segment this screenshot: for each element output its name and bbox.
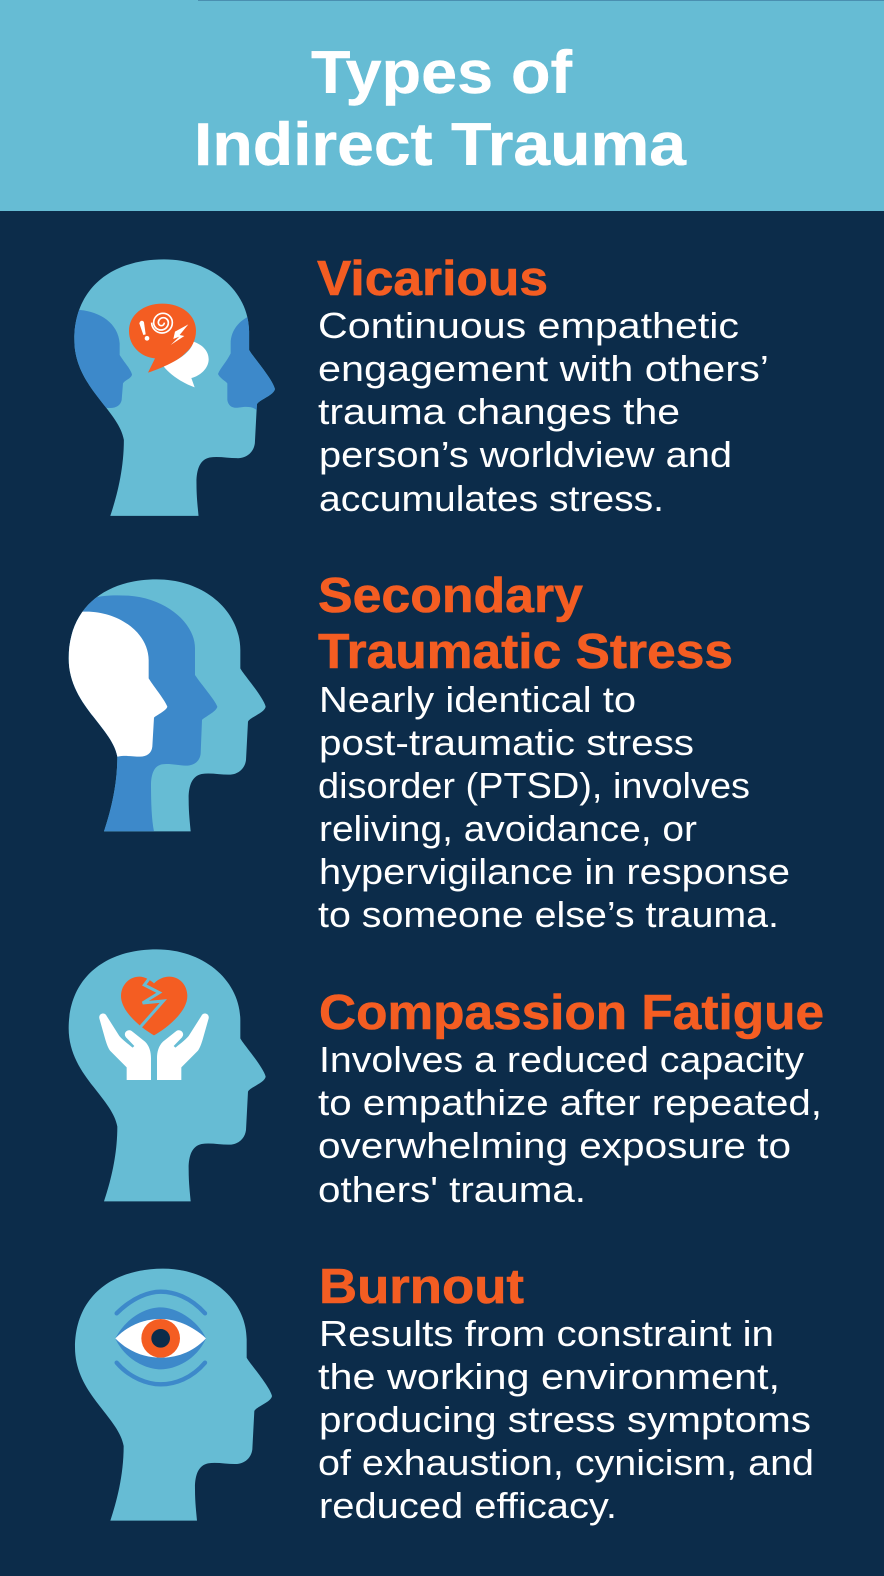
- text: vicarious description: Continuous empathetic: [318, 305, 739, 346]
- title: Indirect Trauma: [194, 111, 687, 178]
- heading: Secondary Traumatic Stress: Traumatic Stress: [318, 625, 733, 679]
- icon: head with eye: [75, 1269, 272, 1521]
- text: secondary description: hypervigilance in response: [319, 851, 790, 892]
- text: compassion description: Involves a reduced capacity: [319, 1039, 804, 1080]
- panel: secondary traumatic stress: [63, 569, 790, 935]
- text: compassion description: to empathize after repeated,: [318, 1082, 822, 1123]
- text: compassion description: [318, 1039, 822, 1210]
- text: vicarious description: [318, 305, 769, 519]
- heading: Burnout: Burnout: [319, 1260, 524, 1314]
- text: compassion description: overwhelming exposure to: [318, 1125, 791, 1166]
- text: burnout description: the working environment,: [318, 1356, 780, 1397]
- text: burnout description: reduced efficacy.: [319, 1485, 617, 1526]
- header banner: [0, 0, 884, 211]
- panel: vicarious: [63, 252, 769, 519]
- text: vicarious description: accumulates stress.: [319, 478, 664, 519]
- text: vicarious description: trauma changes the: [318, 391, 680, 432]
- heading: Vicarious: Vicarious: [317, 252, 548, 306]
- title: Types of: [311, 39, 573, 106]
- panel: burnout: [75, 1260, 814, 1526]
- text: compassion description: others' trauma.: [318, 1169, 586, 1210]
- icon: head with heart in hands: [69, 949, 266, 1201]
- text: secondary description: post-traumatic stress: [319, 722, 694, 763]
- text: vicarious description: person’s worldview and: [319, 434, 732, 475]
- title: [194, 39, 687, 178]
- text: burnout description: Results from constraint in: [319, 1313, 774, 1354]
- text: secondary description: [318, 679, 790, 935]
- text: burnout description: [318, 1313, 814, 1526]
- text: secondary description: Nearly identical to: [319, 679, 636, 720]
- text: vicarious description: engagement with others’: [318, 348, 769, 389]
- heading: Secondary Traumatic Stress: Secondary: [318, 569, 583, 623]
- heading: Compassion Fatigue: Compassion Fatigue: [319, 986, 824, 1040]
- panel: compassion fatigue: [69, 949, 824, 1210]
- text: secondary description: to someone else’s trauma.: [318, 894, 779, 935]
- text: burnout description: of exhaustion, cynicism, and: [318, 1442, 814, 1483]
- icon: head with speech bubbles: [63, 259, 283, 516]
- text: secondary description: disorder (PTSD), involves: [318, 765, 750, 806]
- icon: layered heads: [63, 579, 266, 831]
- text: burnout description: producing stress symptoms: [319, 1399, 811, 1440]
- heading: Secondary Traumatic Stress: [318, 569, 733, 679]
- text: secondary description: reliving, avoidance, or: [319, 808, 697, 849]
